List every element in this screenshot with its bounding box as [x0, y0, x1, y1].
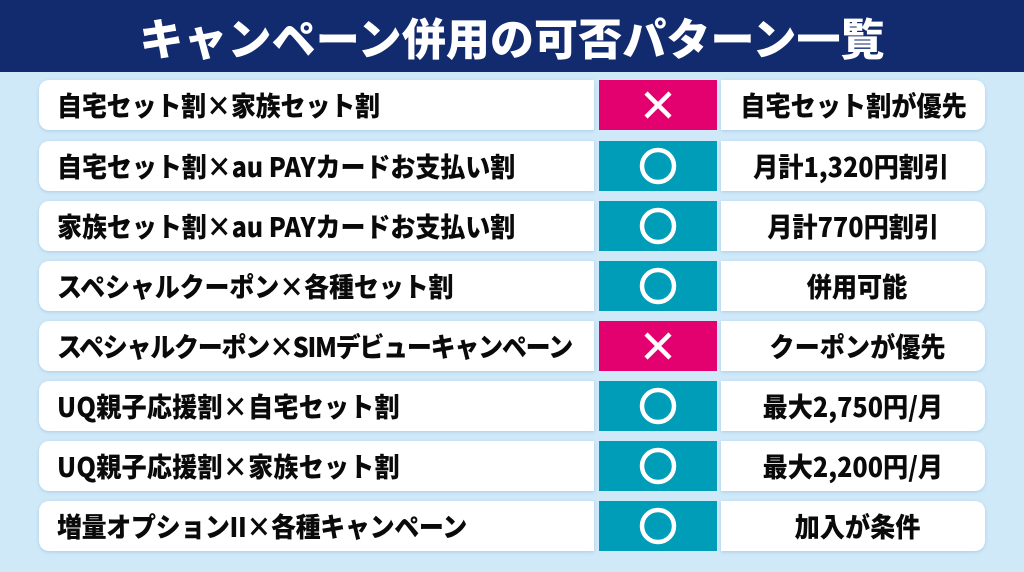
result: [721, 321, 985, 371]
result: 最大2,750円/月: [763, 386, 943, 424]
result: [721, 141, 985, 191]
campaign pair: [39, 261, 594, 311]
result: 加入が条件: [794, 506, 920, 544]
circle mark: [599, 201, 717, 251]
row 8: [38, 501, 986, 553]
campaign pair: スペシャルクーポン×各種セット割: [57, 266, 453, 304]
row 6: [38, 381, 986, 433]
circle mark: [599, 381, 717, 431]
campaign pair: [39, 501, 594, 551]
result: 月計1,320円割引: [754, 146, 949, 184]
circle mark: [599, 141, 717, 191]
result: 月計770円割引: [767, 206, 939, 244]
row 5: [38, 321, 986, 373]
campaign pair: 自宅セット割×au PAYカードお支払い割: [57, 146, 515, 184]
circle mark: [599, 441, 717, 491]
campaign pair: 自宅セット割×家族セット割: [57, 84, 380, 124]
campaign pair: [39, 201, 594, 251]
result: [721, 261, 985, 311]
result: [721, 381, 985, 431]
result: 併用可能: [807, 266, 907, 304]
campaign pair: スペシャルクーポン×SIMデビューキャンペーン: [57, 326, 572, 364]
result: [721, 441, 985, 491]
campaign pair: [39, 441, 594, 491]
circle mark: [599, 501, 717, 551]
row 3: [38, 201, 986, 253]
row 2: [38, 141, 986, 193]
cross mark: [599, 80, 717, 130]
result: 自宅セット割が優先: [740, 84, 966, 124]
campaign pair: [39, 141, 594, 191]
result: [721, 201, 985, 251]
circle mark: [599, 261, 717, 311]
result: [721, 80, 985, 130]
campaign pair: [39, 381, 594, 431]
campaign pair: 家族セット割×au PAYカードお支払い割: [57, 206, 515, 244]
result: 最大2,200円/月: [763, 446, 943, 484]
title: キャンペーン併用の可否パターン一覧: [139, 4, 885, 68]
campaign pair: UQ親子応援割×家族セット割: [57, 446, 400, 484]
cross mark: [599, 321, 717, 371]
row 1: [38, 80, 986, 132]
row 7: [38, 441, 986, 493]
result: [721, 501, 985, 551]
campaign pair: UQ親子応援割×自宅セット割: [57, 386, 400, 424]
result: クーポンが優先: [769, 326, 945, 364]
campaign pair: 増量オプションII×各種キャンペーン: [57, 506, 467, 544]
row 4: [38, 261, 986, 313]
header band: [0, 0, 1024, 72]
campaign pair: [39, 80, 594, 130]
